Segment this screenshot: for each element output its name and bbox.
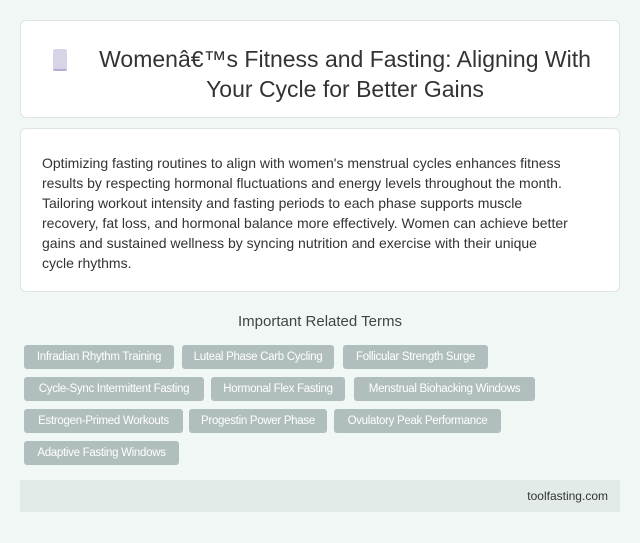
tags: Progestin Power Phase [201,415,315,427]
icon: document [53,49,67,71]
tags: Menstrual Biohacking Windows [369,383,520,395]
description card [20,128,620,292]
footer text: toolfasting.com [527,489,608,503]
tags: Luteal Phase Carb Cycling [194,351,322,363]
description text: Optimizing fasting routines to align with women's menstrual cycles enhances fitness results by respecting hormonal fluctuations and energy levels throughout the month. Tailoring workout intensity and fasting periods to each phase supports muscle recovery, fat loss, and hormonal balance more effectively. Women can achieve better gains and sustained wellness by syncing nutrition and exercise with their unique cycle rhythms. [42,155,568,271]
tags: Cycle-Sync Intermittent Fasting [39,383,189,395]
tags: Follicular Strength Surge [356,351,475,363]
tags: Adaptive Fasting Windows [37,447,166,459]
tags: Estrogen-Primed Workouts [38,415,169,427]
tags: Infradian Rhythm Training [37,351,161,363]
title: Womenâ€™s Fitness and Fasting: Aligning With Your Cycle for Better Gains [99,46,591,102]
heading: related terms: Important Related Terms [238,313,402,330]
tags: Hormonal Flex Fasting [223,383,333,395]
tags: Ovulatory Peak Performance [348,415,487,427]
footer [20,480,620,512]
header card [20,20,620,118]
